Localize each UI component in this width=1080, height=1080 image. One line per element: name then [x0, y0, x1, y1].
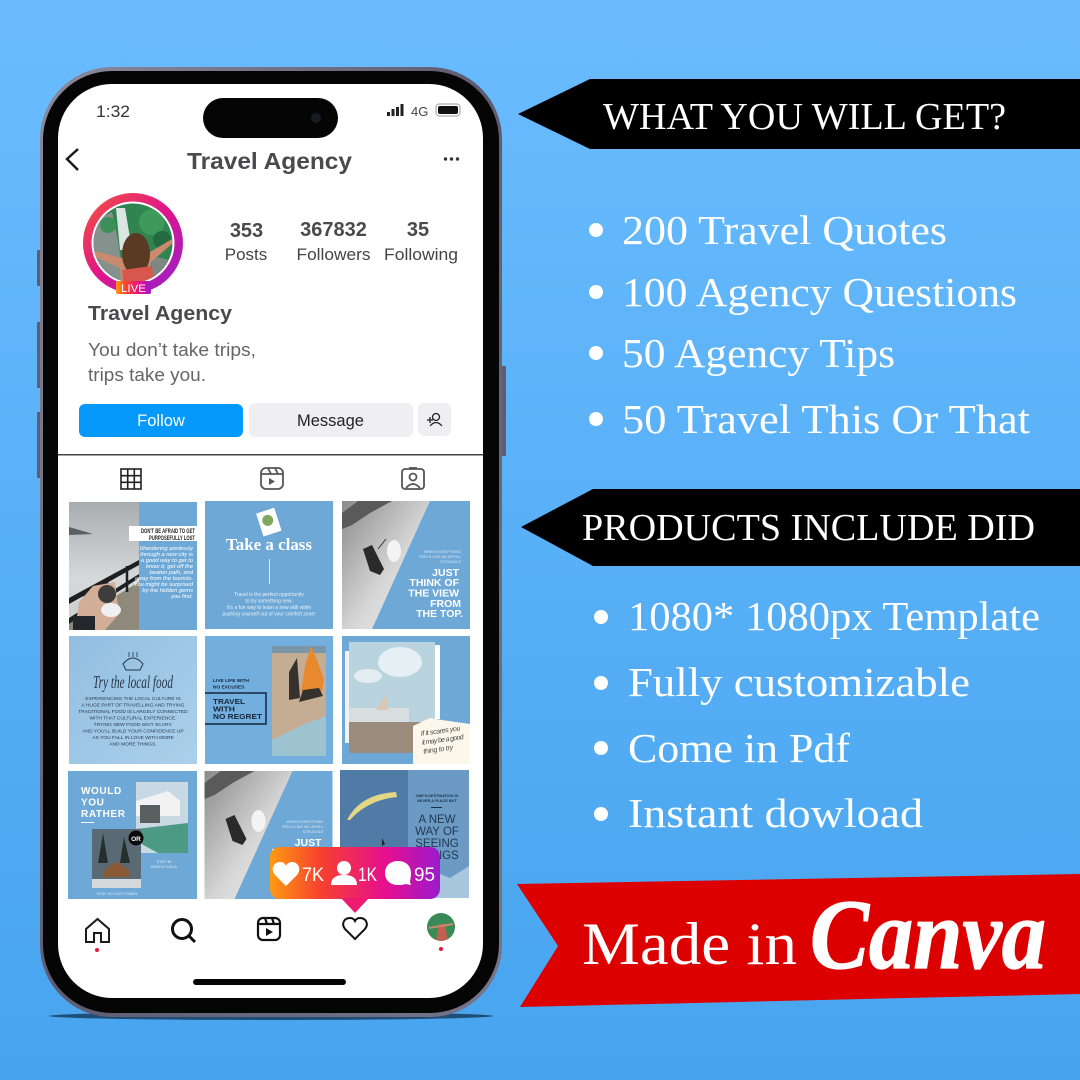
profile stats: 367832 — [300, 219, 367, 241]
tile: just think of the view: THE VIEW — [408, 588, 459, 600]
tile: take a class — [205, 501, 333, 629]
list: what you will get: 200 Travel Quotes — [622, 207, 947, 253]
tile: airplane collage: it may be a good — [422, 734, 465, 747]
tile: just think of the view: THE TOP. — [416, 608, 463, 620]
profile header title: Travel Agency — [187, 148, 352, 174]
tile: would you rather: STAY IN COZY CABIN — [97, 891, 137, 896]
list: what you will get: 50 Agency Tips — [622, 330, 895, 376]
post grid — [68, 501, 470, 899]
phone shadow — [49, 1012, 493, 1020]
tile: don't be afraid: you find. — [170, 594, 193, 600]
list: products include: Fully customizable — [628, 659, 970, 705]
banner: made in canva: Canva — [810, 879, 1046, 990]
icon: comment bubble — [385, 861, 411, 885]
banner: made in canva: Made in — [582, 911, 797, 977]
tile: take a class: Take a class — [226, 535, 313, 554]
list: products include: 1080* 1080px Template — [628, 593, 1040, 639]
tile: don't be afraid: You might be surprised — [134, 582, 194, 588]
tile: just think of the view repeat: STRUGGLE — [303, 830, 324, 834]
avatar with gradient ring — [83, 193, 183, 295]
tile: try the local food: EXPERIENCING THE LOCAL CULTURE IS — [85, 696, 181, 702]
status bar icons: 4G — [411, 104, 428, 119]
tile: try the local food: AS YOU FALL IN LOVE WITH MORE — [92, 735, 175, 741]
tile: don't be afraid: beaten path, and — [149, 570, 194, 576]
tile: would you rather: RATHER — [81, 809, 126, 820]
profile divider — [58, 454, 483, 456]
tile: would you rather: YOU — [81, 798, 104, 808]
tile: just think of the view: WHEN EVERYTHING — [424, 550, 461, 554]
tile: travel with no regret — [205, 636, 333, 764]
tile: just think of the view: STRUGGLE — [440, 560, 461, 564]
icon: home — [86, 919, 109, 942]
bottom nav — [86, 913, 455, 952]
tile: a new way of seeing things — [340, 770, 469, 898]
notification bubble — [270, 847, 440, 913]
tile: airplane collage — [342, 636, 470, 764]
banner: what you will get: WHAT YOU WILL GET? — [603, 96, 1006, 138]
tile: a new way of seeing things: ONE'S DESTINATION IS — [416, 794, 459, 798]
tile: just think of the view repeat: THINK OF — [272, 847, 322, 859]
icon: like heart — [273, 862, 299, 886]
tile: try the local food: TRYING NEW FOOD ISN'T SCARY, — [94, 722, 172, 728]
tile: don't be afraid: through a new city is — [140, 552, 193, 558]
tile: take a class: It's a fun way to learn a new skill while — [227, 605, 311, 611]
tile: take a class: pushing yourself out of your comfort zone! — [222, 612, 316, 618]
banner: products include — [521, 489, 1080, 566]
live badge — [116, 281, 151, 294]
back arrow — [67, 149, 78, 170]
follow button: Follow — [137, 412, 185, 430]
tab icon: tagged — [402, 468, 424, 489]
bio text: trips take you. — [88, 365, 206, 385]
list: products include: Instant dowload — [628, 790, 923, 836]
profile stats: 353 — [230, 220, 263, 242]
tile: travel with no regret: TRAVEL — [213, 697, 245, 706]
tile: just think of the view repeat: JUST — [295, 837, 322, 849]
tile: would you rather: WOULD — [81, 786, 122, 797]
profile stats: Following — [384, 245, 458, 264]
tile: try the local food: AND YOU'LL BUILD YOUR CONFIDENCE UP — [82, 728, 184, 734]
bio text — [88, 340, 256, 385]
tab icon: reels — [261, 468, 283, 489]
message button: Message — [297, 412, 364, 430]
tile: try the local food — [69, 636, 197, 764]
tile: a new way of seeing things: NEVER A PLACE BUT — [417, 799, 457, 803]
tile: try the local food: WITH THAT CULTURAL EXPERIENCE. — [90, 716, 176, 722]
banner: made in canva — [517, 874, 1080, 1007]
phone mockup — [37, 67, 506, 1020]
profile stats: Followers — [296, 245, 370, 264]
tile: just think of the view repeat — [204, 771, 332, 899]
icon: profile avatar — [427, 913, 455, 941]
tab icon: grid — [121, 469, 141, 489]
profile name: Travel Agency — [88, 303, 233, 325]
message button — [249, 403, 413, 437]
tile: just think of the view: FROM — [430, 598, 461, 610]
tile: would you rather — [68, 771, 197, 899]
status bar time: 1:32 — [96, 103, 130, 121]
tile: take a class: Travel is the perfect opportunity — [234, 592, 304, 598]
list: what you will get: 100 Agency Questions — [622, 269, 1017, 315]
tile: would you rather: OR — [131, 836, 141, 843]
tile: a new way of seeing things: THINGS — [415, 850, 459, 862]
tile: just think of the view — [342, 501, 470, 629]
icon: reels — [258, 918, 280, 940]
avatar with gradient ring: LIVE — [121, 283, 146, 295]
icon: heart — [343, 918, 367, 939]
tile: just think of the view repeat: WHEN EVERYTHING — [286, 820, 324, 824]
add friend button — [418, 403, 451, 436]
tile: don't be afraid — [69, 502, 197, 630]
tile: travel with no regret: LIVE LIFE WITH — [213, 678, 250, 684]
banner: what you will get — [518, 79, 1080, 149]
tile: try the local food: AND MORE THINGS. — [109, 742, 157, 748]
tile: travel with no regret: NO REGRET — [213, 712, 262, 721]
tile: don't be afraid: a good way to get to — [141, 558, 194, 564]
list: products include — [594, 593, 1040, 836]
phone body — [40, 67, 502, 1017]
icon: follower person — [331, 861, 357, 885]
notification bubble: 1K — [358, 865, 377, 886]
phone screen — [58, 84, 483, 998]
tile: just think of the view repeat: FEELS LIKE AN UPHILL — [282, 825, 324, 829]
bio text: You don’t take trips, — [88, 340, 256, 360]
tile: travel with no regret: NO EXCUSES — [213, 684, 245, 690]
banner: products include: PRODUCTS INCLUDE DID — [582, 507, 1035, 549]
tile: don't be afraid: know it, get off the — [146, 564, 194, 570]
tile: just think of the view: JUST — [432, 567, 460, 579]
tile: airplane collage: thing to try — [423, 744, 454, 756]
tile: would you rather: STAY IN — [157, 859, 172, 864]
tile: try the local food: A HUGE PART OF TRAVELLING AND TRYING — [82, 702, 185, 708]
tile: try the local food: TRADITIONAL FOOD IS LARGELY CONNECTED — [78, 709, 188, 715]
notification bubble: 95 — [414, 865, 435, 886]
list: what you will get — [589, 207, 1031, 442]
side buttons — [37, 250, 506, 478]
status bar icons — [387, 104, 460, 119]
tile: just think of the view: THINK OF — [409, 577, 460, 589]
tile: don't be afraid: away from the tourists. — [135, 576, 193, 582]
profile stats — [225, 219, 458, 264]
list: what you will get: 50 Travel This Or That — [622, 396, 1031, 442]
dynamic island — [203, 98, 338, 138]
notification bubble: 7K — [302, 865, 324, 886]
tile: a new way of seeing things: WAY OF — [415, 826, 459, 838]
more menu dots — [444, 157, 459, 161]
icon: search — [172, 920, 195, 942]
tile: would you rather: BEACH VILLA — [151, 864, 177, 869]
tile: travel with no regret: WITH — [213, 704, 235, 714]
follow button — [79, 404, 243, 437]
tile: don't be afraid: Wandering aimlessly — [140, 546, 194, 552]
tile: take a class: to try something new. — [245, 598, 293, 604]
tile: airplane collage: If it scares you — [420, 725, 461, 738]
list: products include: Come in Pdf — [628, 725, 850, 771]
tile: just think of the view: FEELS LIKE AN UPHILL — [419, 555, 461, 559]
tile: a new way of seeing things: SEEING — [415, 838, 459, 850]
tile: don't be afraid: by the hidden gems — [142, 588, 193, 594]
home indicator — [193, 979, 346, 985]
profile stats: Posts — [225, 245, 267, 264]
profile stats: 35 — [407, 219, 429, 241]
tile: a new way of seeing things: A NEW — [418, 814, 456, 826]
